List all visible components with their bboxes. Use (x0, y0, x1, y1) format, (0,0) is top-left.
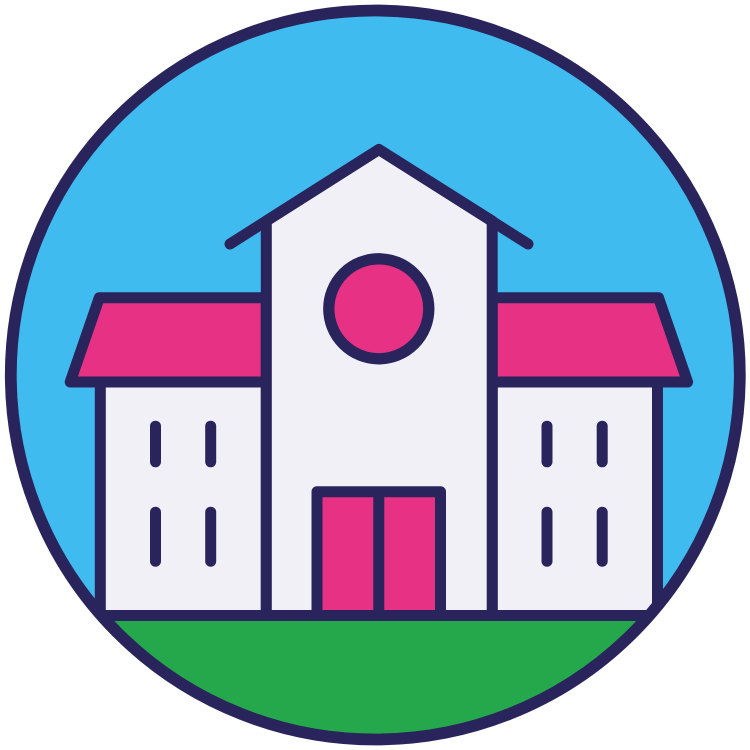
ground line (0, 610, 750, 621)
left wing windows (156, 426, 211, 561)
green lawn (114, 621, 636, 734)
central tower (266, 150, 492, 616)
right roof (492, 298, 688, 382)
left wing wall (100, 382, 266, 616)
left roof (70, 298, 266, 382)
round tower window (329, 259, 429, 359)
tower roof line (230, 150, 528, 244)
school building (64, 144, 694, 621)
double door (317, 492, 440, 616)
right wing wall (492, 382, 658, 616)
right wing windows (547, 426, 602, 561)
